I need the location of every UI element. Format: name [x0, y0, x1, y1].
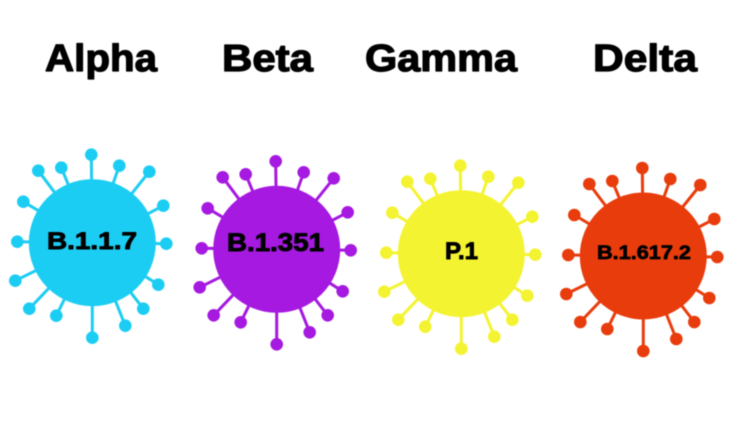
virus: Alpha B.1.1.7	[9, 148, 173, 344]
heading: Delta: Delta	[593, 38, 698, 80]
heading: Gamma: Gamma	[365, 38, 518, 80]
label: B.1.1.7: B.1.1.7	[47, 228, 137, 255]
heading: Beta: Beta	[222, 38, 314, 80]
virus: Gamma P.1	[378, 159, 542, 355]
icon: cyan virus	[9, 148, 173, 344]
virus: Beta B.1.351	[193, 155, 357, 351]
icon: purple virus	[193, 155, 357, 351]
icon: red-orange virus	[560, 162, 724, 357]
label: B.1.617.2: B.1.617.2	[597, 243, 691, 264]
label: B.1.351: B.1.351	[227, 229, 324, 257]
virus: Delta B.1.617.2	[560, 162, 724, 357]
heading: Alpha: Alpha	[45, 38, 158, 80]
label: P.1: P.1	[445, 238, 478, 265]
icon: yellow virus	[378, 159, 542, 355]
